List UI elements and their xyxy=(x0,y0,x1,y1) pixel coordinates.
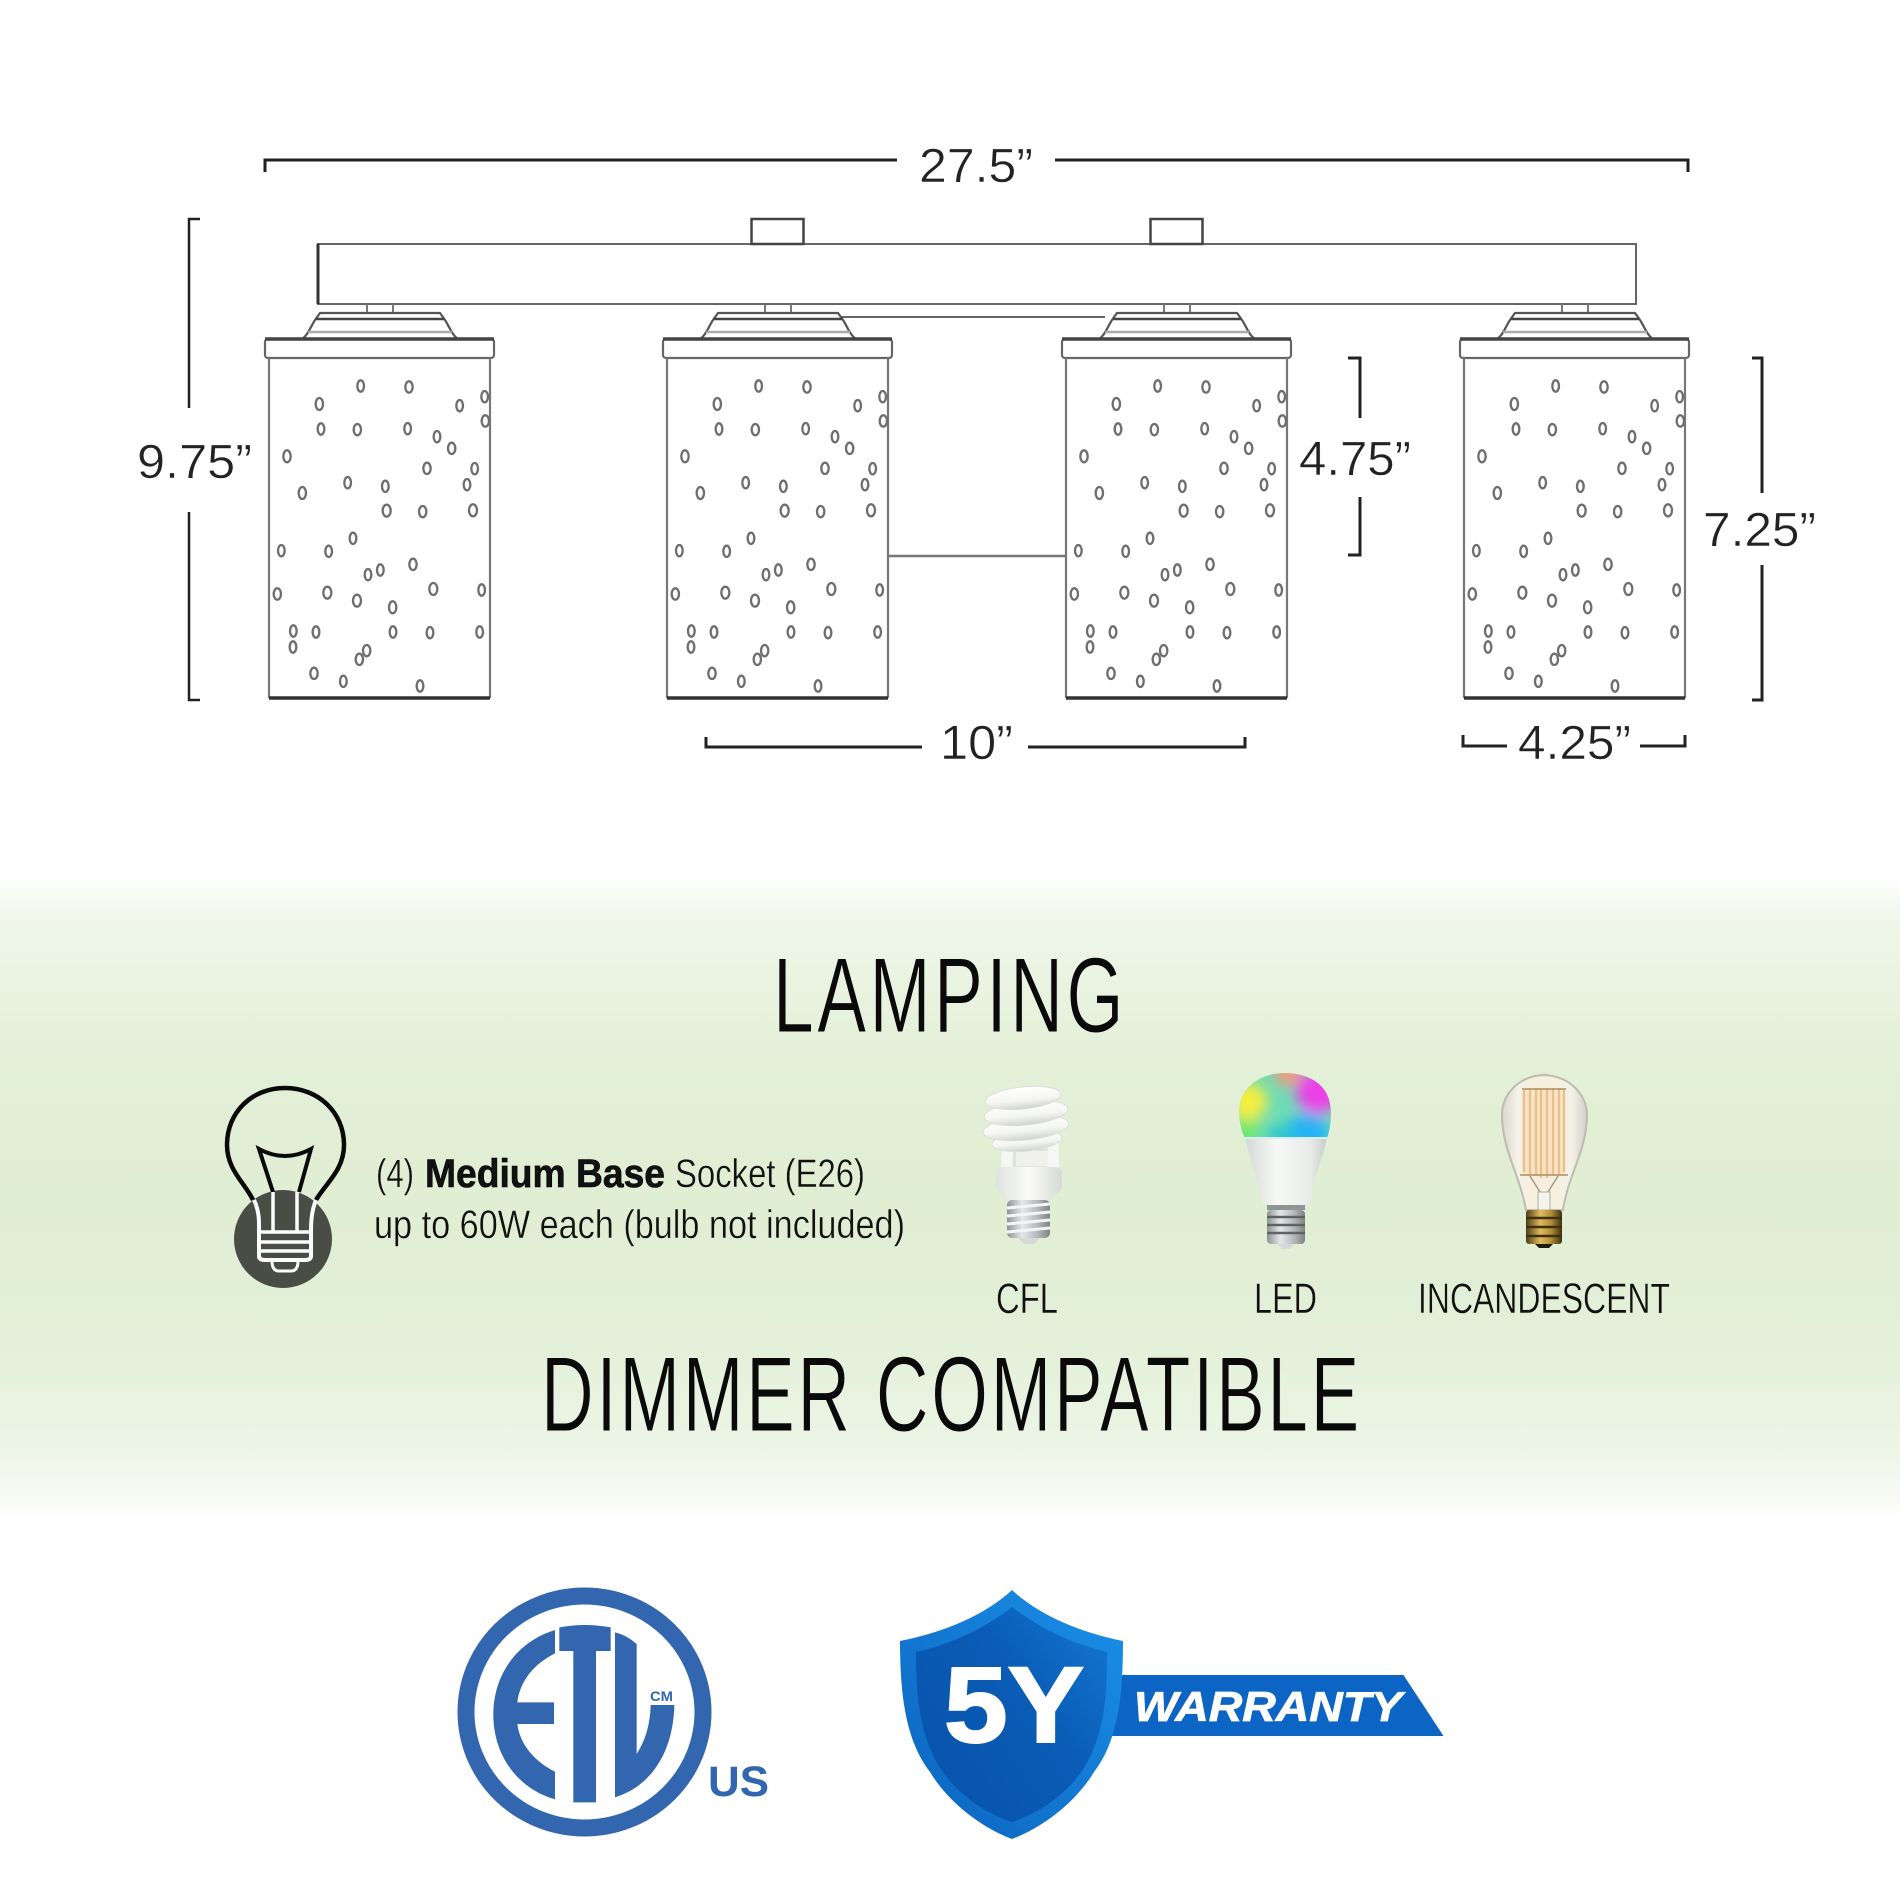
lamp 2 xyxy=(663,304,892,698)
panel: lamping band xyxy=(0,878,1900,1519)
ETL ring xyxy=(466,1596,703,1828)
shield xyxy=(900,1590,1123,1839)
icon: Edison incandescent bulb xyxy=(1502,1072,1587,1248)
badge: 5 year warranty xyxy=(900,1590,1444,1839)
mounting bar xyxy=(318,219,1636,556)
WARRANTY: WARRANTY xyxy=(1134,1683,1406,1730)
shade height dimension 4.75 inches xyxy=(1299,358,1411,555)
fixture height dimension 7.25 inches xyxy=(1703,358,1816,700)
label: CFL: CFL xyxy=(996,1275,1058,1323)
width dimension 27.5 inches xyxy=(265,140,1688,193)
height dimension 9.75 inches xyxy=(137,219,252,700)
logo: ETL certification xyxy=(466,1596,769,1828)
shade width dimension 4.25 inches xyxy=(1463,717,1685,770)
spacing dimension 10 inches: 10” xyxy=(940,717,1013,770)
socket text: (4) xyxy=(376,1152,414,1196)
ETL letterforms xyxy=(493,1625,674,1802)
5Y: 5Y xyxy=(944,1644,1084,1765)
socket text xyxy=(374,1152,905,1247)
heading: lamping: LAMPING xyxy=(773,935,1127,1055)
ribbon xyxy=(1100,1675,1444,1736)
width dimension 27.5 inches: 27.5” xyxy=(919,140,1033,193)
shade width dimension 4.25 inches: 4.25” xyxy=(1518,717,1631,770)
panel: dimension drawing xyxy=(137,140,1816,770)
icon: CFL bulb xyxy=(982,1083,1070,1244)
CM mark: CM xyxy=(650,1688,673,1704)
lamp 4 xyxy=(1460,304,1689,698)
label: LED: LED xyxy=(1254,1275,1317,1323)
spacing dimension 10 inches xyxy=(706,717,1245,770)
icon: RGB LED bulb xyxy=(1239,1073,1331,1249)
lamp 3 xyxy=(1062,304,1291,698)
US mark: US xyxy=(708,1758,769,1806)
socket text: Socket (E26) xyxy=(675,1152,865,1196)
socket text: Medium Base xyxy=(425,1152,665,1196)
height dimension 9.75 inches: 9.75” xyxy=(137,436,252,489)
lamp 1 xyxy=(265,304,494,698)
icon: bulb outline with dark base xyxy=(227,1088,344,1288)
heading: dimmer compatible: DIMMER COMPATIBLE xyxy=(541,1334,1362,1454)
label: incandescent: INCANDESCENT xyxy=(1418,1275,1670,1323)
socket text: up to 60W each (bulb not included) xyxy=(374,1203,905,1247)
fixture height dimension 7.25 inches: 7.25” xyxy=(1703,504,1816,557)
shade height dimension 4.75 inches: 4.75” xyxy=(1299,433,1411,486)
green gradient background xyxy=(0,878,1900,1519)
